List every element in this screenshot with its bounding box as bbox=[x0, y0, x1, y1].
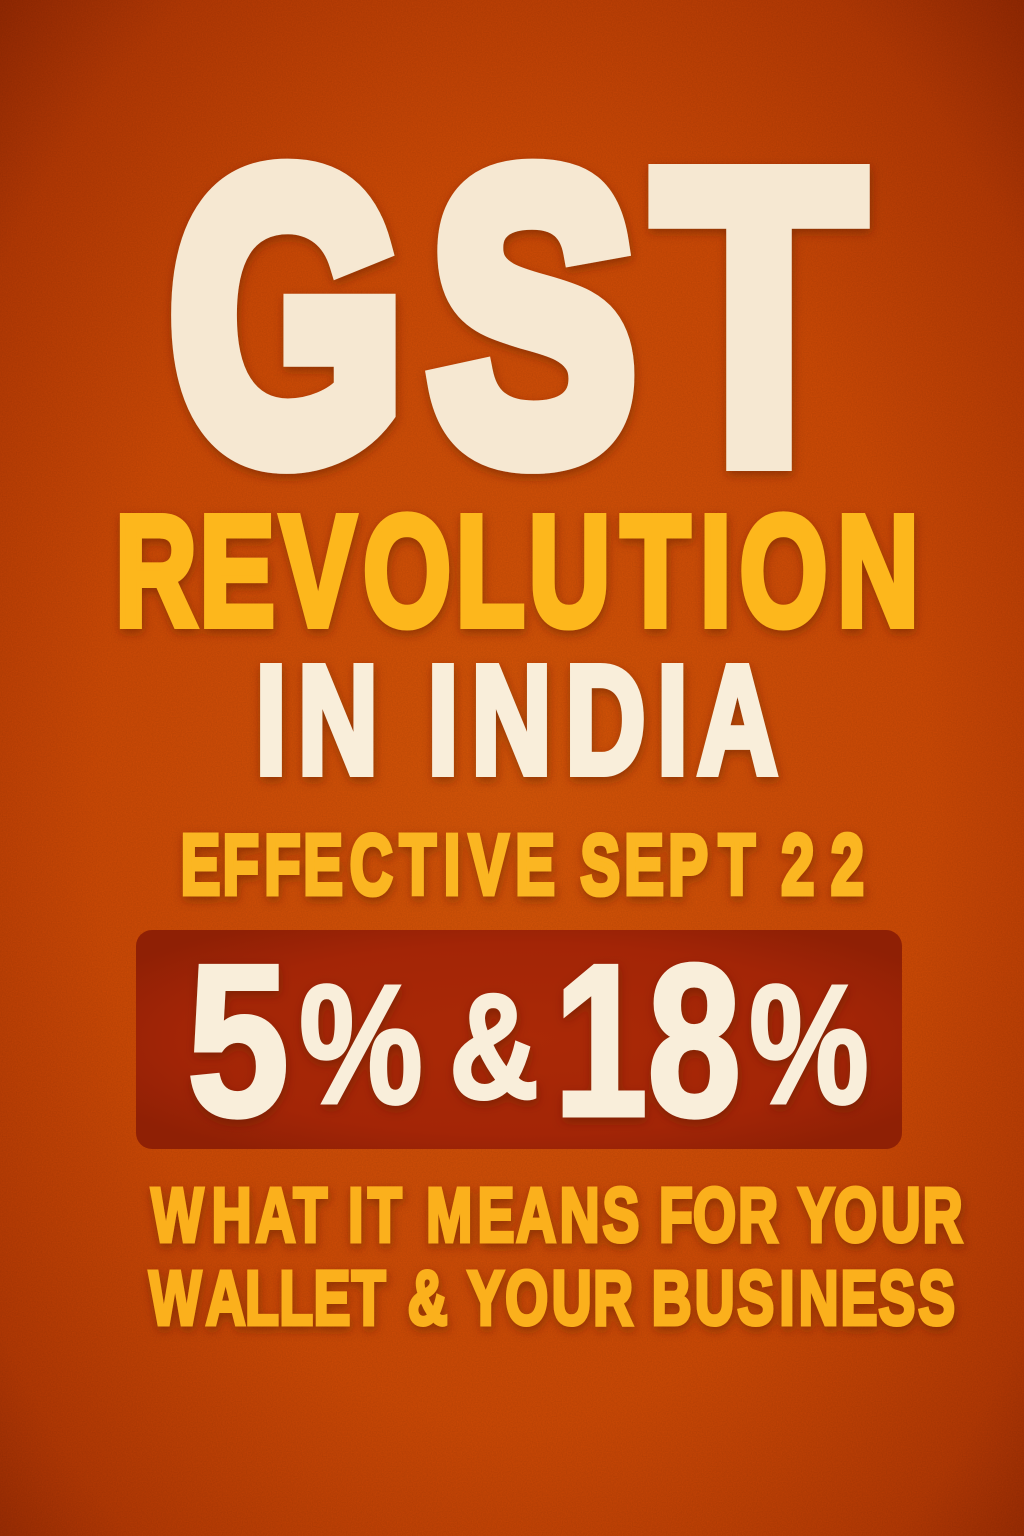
panel: GST rates bbox=[136, 919, 902, 1161]
rates text: 18 bbox=[554, 919, 741, 1161]
rates text: 5 bbox=[187, 919, 289, 1161]
rates text: % bbox=[299, 950, 423, 1140]
rates text bbox=[187, 919, 869, 1161]
title: GST: S bbox=[430, 91, 635, 541]
title: GST: T bbox=[652, 83, 866, 552]
heading: REVOLUTION: REVOLUTION bbox=[115, 483, 919, 658]
title: GST: G bbox=[170, 91, 403, 541]
subheading: effective date: EFFECTIVE SEPT 22 bbox=[181, 818, 864, 913]
tagline bbox=[149, 1173, 963, 1342]
rates text: % bbox=[749, 950, 869, 1140]
title: GST bbox=[170, 83, 866, 552]
panel background bbox=[136, 930, 902, 1149]
tagline line 2: WALLET & YOUR BUSINESS bbox=[149, 1256, 955, 1342]
heading: IN INDIA: IN INDIA bbox=[256, 635, 778, 806]
tagline line 1: WHAT IT MEANS FOR YOUR bbox=[151, 1173, 963, 1259]
rates text: & bbox=[449, 962, 539, 1130]
